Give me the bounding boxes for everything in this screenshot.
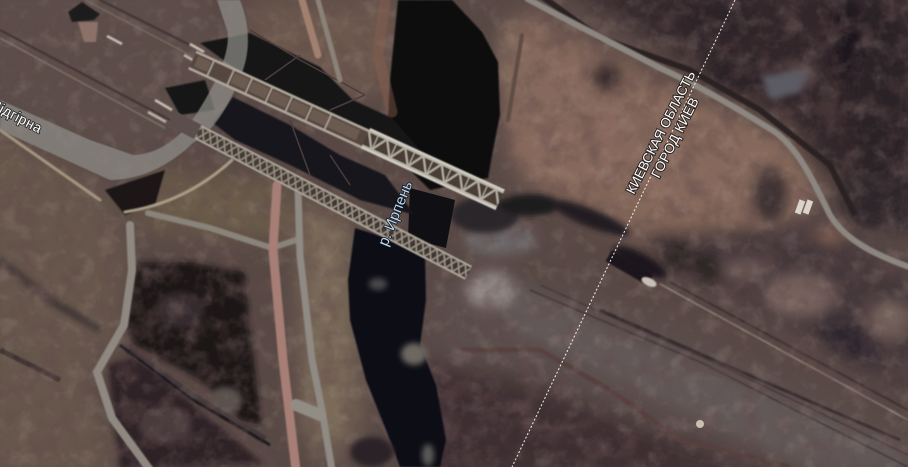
park lawns and dark thickets [0,260,270,467]
river: p. Irpen water [348,0,500,467]
park footpaths [0,0,522,467]
river label: р. Ирпень [375,179,416,248]
lower rail bridge truss [168,111,472,280]
right bank road [526,0,908,268]
bridge shadows [105,30,420,215]
boundary label: Kyiv city: ГОРОД КИЕВ [648,95,702,180]
rail embankment top left [0,0,204,128]
white vehicles by the road [795,199,813,215]
burnt rail cars [606,250,704,428]
vegetation: top right and right thicket [647,0,908,372]
dark vegetation beside the destroyed embankment [451,194,671,284]
boundary label: Kyiv oblast: КИЕВСКАЯ ОБЛАСТЬ [623,68,698,196]
small grey building, top right [762,70,808,100]
road: Pidhirna overlay band [0,0,248,180]
field: lighter clearing on the right bank [500,20,815,225]
upper rail bridge truss [189,50,504,209]
boundary line: oblast / city [512,0,735,467]
rail corridor with tracks [460,224,908,467]
